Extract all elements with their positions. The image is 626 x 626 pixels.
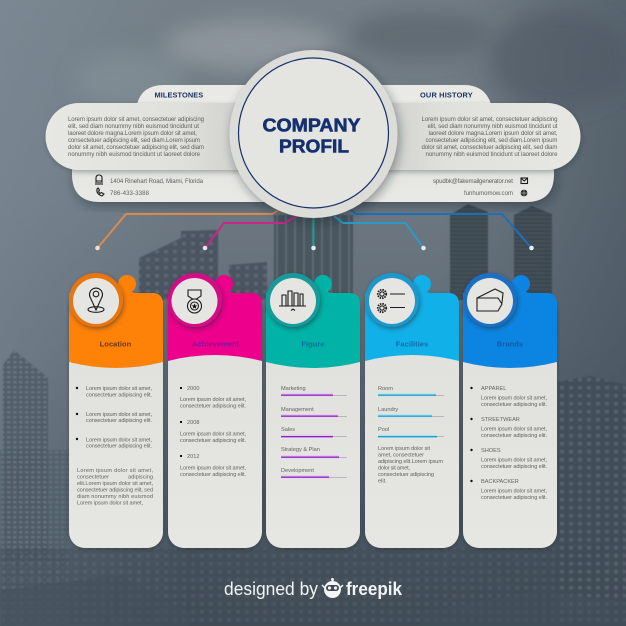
lower contact strip bbox=[340, 168, 554, 202]
brand list: Lorem ipsum dolor sit amet, bbox=[481, 426, 547, 432]
milestones body panel bbox=[45, 103, 270, 170]
card body bbox=[365, 293, 459, 548]
website: funhumomow.com bbox=[464, 190, 513, 197]
card body bbox=[168, 293, 262, 548]
bullet list: Lorem ipsum dolor sit amet, bbox=[86, 412, 152, 418]
brand list: Lorem ipsum dolor sit amet, bbox=[481, 396, 547, 402]
icon disc bbox=[172, 278, 218, 324]
line: pink to achievement bbox=[203, 216, 296, 250]
history paragraph: nonummy nibh euismod tincidunt ut laoreet dolore bbox=[426, 151, 558, 158]
milestones tab bbox=[137, 85, 290, 104]
paragraph: adipiscing bbox=[128, 474, 153, 480]
timeline list: Lorem ipsum dolor sit amet, bbox=[180, 466, 246, 472]
line: dark blue to brands bbox=[350, 209, 534, 250]
bullet list: Lorem ipsum dolor sit amet, bbox=[86, 438, 152, 444]
icon: medal bbox=[188, 290, 202, 313]
facility bars: Room bbox=[378, 386, 393, 392]
timeline list: 2000 bbox=[187, 386, 199, 392]
brand list: STREETWEAR bbox=[481, 417, 520, 423]
paragraph: Lorem ipsum dolor sit amet, bbox=[77, 500, 143, 506]
timeline list: consectetuer adipiscing elit. bbox=[180, 404, 246, 410]
line: light blue to facilities bbox=[334, 216, 426, 250]
coloured header bbox=[168, 284, 262, 361]
timeline list: 2008 bbox=[187, 420, 199, 426]
card title: Brands bbox=[497, 340, 523, 348]
timeline list: Lorem ipsum dolor sit amet, bbox=[180, 432, 246, 438]
facility bars: Laundry bbox=[378, 407, 398, 413]
icon disc bbox=[369, 278, 415, 324]
panel: milestones bbox=[45, 85, 290, 202]
icon: globe bbox=[521, 190, 527, 196]
phone number: 786-433-3388 bbox=[110, 190, 150, 197]
timeline list bbox=[180, 386, 246, 478]
bullet list: consectetuer adipiscing elit. bbox=[86, 444, 152, 450]
milestones heading: MILESTONES bbox=[154, 90, 204, 100]
title: COMPANY bbox=[262, 116, 360, 136]
skill bars bbox=[281, 386, 347, 478]
icon disc bbox=[73, 278, 119, 324]
brand list: consectetuer adipiscing elit. bbox=[481, 464, 547, 470]
bullet list bbox=[76, 386, 152, 450]
bar: marketing bbox=[281, 393, 347, 396]
tab bump bbox=[118, 275, 136, 293]
paragraph: diam nonummy nibh euismod bbox=[77, 494, 153, 500]
history paragraph bbox=[422, 116, 558, 158]
our history heading: OUR HISTORY bbox=[420, 90, 473, 100]
card body bbox=[69, 293, 163, 548]
facility bars: Pool bbox=[378, 427, 389, 433]
icon ring bbox=[266, 273, 320, 327]
timeline list: consectetuer adipiscing elit. bbox=[180, 472, 246, 478]
paragraph: dolor sit amet, bbox=[378, 466, 410, 472]
icon: bar chart bbox=[279, 291, 306, 310]
email address: spudbk@fakemailgenerator.net bbox=[433, 178, 513, 185]
inner ring bbox=[238, 58, 388, 208]
milestones paragraph: dolor sit amet, consectetuer adipiscing elit, sed diam bbox=[68, 144, 204, 151]
card title: Facilities bbox=[396, 340, 428, 348]
brand list: BACKPACKER bbox=[481, 479, 519, 485]
tab bump bbox=[314, 275, 332, 293]
paragraph: consectetuer bbox=[77, 474, 109, 480]
history body panel bbox=[356, 103, 580, 170]
milestones paragraph: consectetuer adipiscing elit, sed diam.Lorem ipsum bbox=[68, 137, 200, 144]
facility bars bbox=[378, 386, 444, 438]
tab bump bbox=[215, 275, 233, 293]
line: orange to location bbox=[95, 210, 279, 250]
icon ring bbox=[365, 273, 419, 327]
history paragraph: Lorem ipsum dolor sit amet, consectetuer adipiscing bbox=[422, 116, 558, 123]
skill bars: Management bbox=[281, 407, 314, 413]
icon: freepik mascot bbox=[322, 578, 343, 598]
milestones paragraph: nonummy nibh euismod tincidunt ut laoreet dolore bbox=[68, 151, 201, 158]
coloured header bbox=[463, 284, 557, 368]
paragraph: Lorem ipsum dolor sit amet, bbox=[77, 468, 153, 474]
bar: pool bbox=[378, 434, 444, 438]
outer disc bbox=[230, 50, 398, 218]
icon: location pin bbox=[88, 288, 104, 312]
brand list: consectetuer adipiscing elit. bbox=[481, 402, 547, 408]
tab bump bbox=[413, 275, 431, 293]
timeline list: 2012 bbox=[187, 454, 199, 460]
milestones paragraph: laoreet dolore magna.Lorem ipsum dolor sit amet, bbox=[68, 130, 197, 137]
history paragraph: consectetuer adipiscing elit, sed diam.Lorem ipsum bbox=[426, 137, 558, 144]
our history tab bbox=[340, 85, 491, 104]
bullet list: Lorem ipsum dolor sit amet, bbox=[86, 386, 152, 392]
bar: management bbox=[281, 414, 347, 418]
skill bars: Strategy & Plan bbox=[281, 447, 320, 453]
card: brands bbox=[463, 273, 557, 548]
icon ring bbox=[69, 273, 123, 327]
timeline list: consectetuer adipiscing elit. bbox=[180, 438, 246, 444]
freepik wordmark: freepik bbox=[346, 579, 403, 599]
bar: sales bbox=[281, 434, 347, 438]
central title badge bbox=[230, 50, 398, 218]
title: PROFIL bbox=[279, 136, 349, 156]
icon ring bbox=[463, 273, 517, 327]
paragraph bbox=[378, 446, 443, 484]
paragraph: elit. bbox=[378, 478, 387, 484]
paragraph: adipiscing elit.Lorem ipsum bbox=[378, 459, 443, 465]
address: 1404 Rinehart Road, Miami, Florida bbox=[110, 178, 204, 185]
paragraph: amet, consectetuer bbox=[378, 452, 424, 458]
icon: gears and lines bbox=[378, 290, 405, 312]
card title: Location bbox=[100, 340, 132, 348]
history paragraph: elit, sed diam nonummy nibh euismod tincidunt ut bbox=[428, 123, 558, 130]
card: figure bbox=[266, 273, 360, 548]
bar: room bbox=[378, 393, 444, 396]
card: achievement bbox=[168, 273, 262, 548]
brand list: Lorem ipsum dolor sit amet, bbox=[481, 458, 547, 464]
brand list: consectetuer adipiscing elit. bbox=[481, 495, 547, 501]
history paragraph: dolor sit amet, consectetuer adipiscing elit, sed diam bbox=[422, 144, 558, 151]
bar: strategy and plan bbox=[281, 455, 347, 458]
milestones paragraph bbox=[68, 116, 204, 158]
card body bbox=[463, 293, 557, 548]
brand list: consectetuer adipiscing elit. bbox=[481, 433, 547, 439]
icon: envelope bbox=[521, 178, 528, 184]
paragraph: consectetuer adipiscing elit, sed bbox=[77, 488, 153, 494]
bar: laundry bbox=[378, 414, 444, 418]
card title: Figure bbox=[301, 340, 325, 348]
card: facilities bbox=[365, 273, 459, 548]
icon: tags bbox=[477, 289, 503, 311]
skill bars: Marketing bbox=[281, 386, 306, 392]
icon: phone bbox=[97, 188, 104, 196]
bullet list: consectetuer adipiscing elit. bbox=[86, 392, 152, 398]
bullet list: consectetuer adipiscing elit. bbox=[86, 418, 152, 424]
footer credit bbox=[224, 578, 403, 599]
paragraph: elit.Lorem ipsum dolor sit amet, bbox=[77, 481, 153, 487]
card body bbox=[266, 293, 360, 548]
title bbox=[262, 116, 360, 156]
connector lines bbox=[95, 209, 534, 250]
card: location bbox=[69, 273, 163, 548]
brand list: SHOES bbox=[481, 448, 501, 454]
bar: development bbox=[281, 475, 347, 478]
brand list: APPAREL bbox=[481, 386, 506, 392]
paragraph: consectetuer adipiscing bbox=[378, 472, 434, 478]
coloured header bbox=[266, 284, 360, 368]
icon disc bbox=[270, 278, 316, 324]
icon ring bbox=[168, 273, 222, 327]
timeline list: Lorem ipsum dolor sit amet, bbox=[180, 397, 246, 403]
icon: building bbox=[96, 175, 102, 185]
coloured header bbox=[69, 284, 163, 368]
line: teal to figure bbox=[311, 216, 316, 250]
coloured header bbox=[365, 284, 459, 361]
milestones paragraph: Lorem ipsum dolor sit amet, consectetuer adipiscing bbox=[68, 116, 204, 123]
paragraph bbox=[77, 468, 153, 506]
icon disc bbox=[467, 278, 513, 324]
paragraph: Lorem ipsum dolor sit bbox=[378, 446, 430, 452]
panel: our history bbox=[340, 85, 580, 202]
designed by text: designed by bbox=[224, 579, 318, 599]
card title: Achievement bbox=[192, 340, 240, 348]
brand list bbox=[470, 386, 547, 501]
milestones paragraph: elit, sed diam nonummy nibh euismod tincidunt ut bbox=[68, 123, 199, 130]
skill bars: Development bbox=[281, 468, 314, 474]
brand list: Lorem ipsum dolor sit amet, bbox=[481, 488, 547, 494]
tab bump bbox=[512, 275, 530, 293]
lower contact strip bbox=[72, 168, 290, 202]
history paragraph: laoreet dolore magna.Lorem ipsum dolor sit amet, bbox=[428, 130, 558, 137]
skill bars: Sales bbox=[281, 427, 295, 433]
